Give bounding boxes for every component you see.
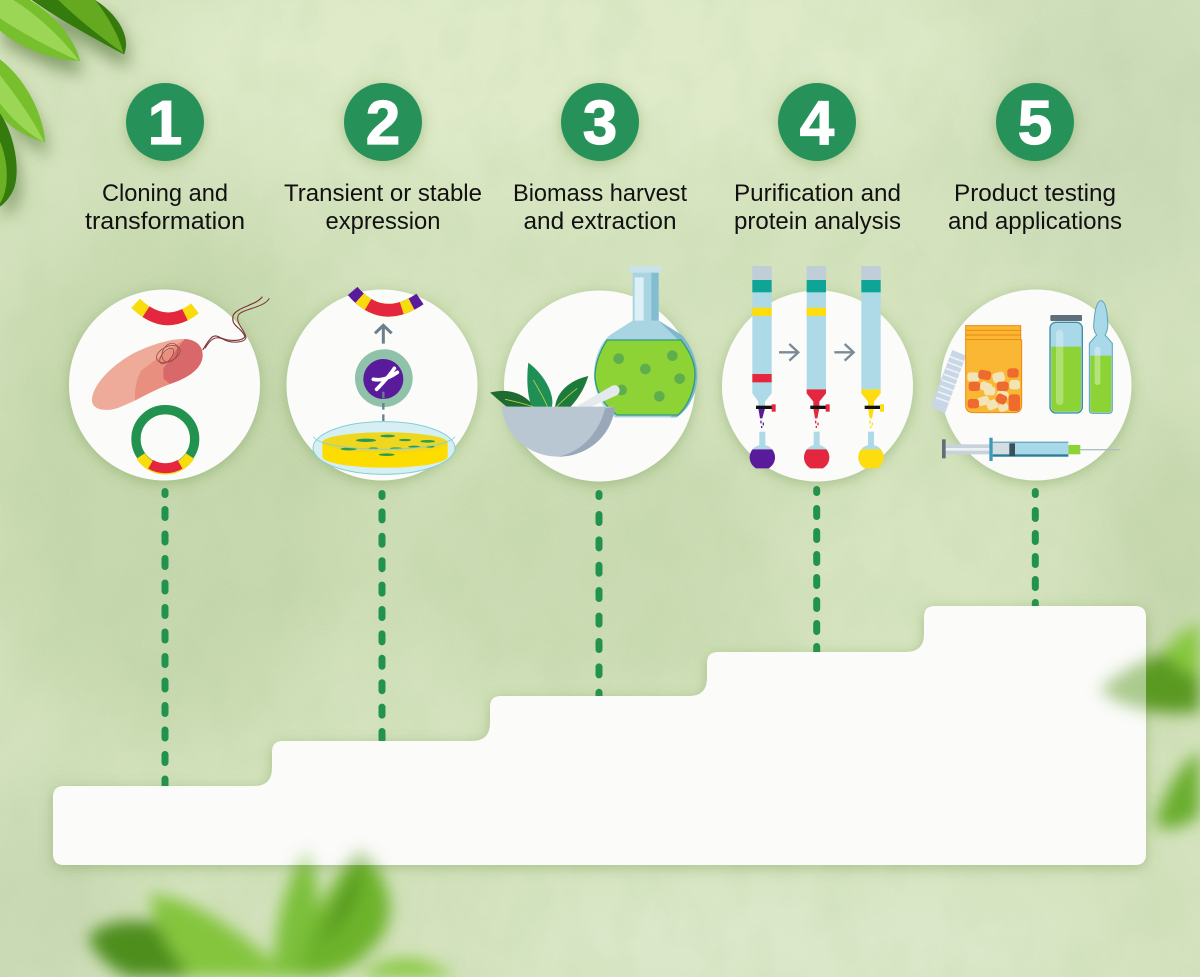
number badge 2: 2: [366, 89, 400, 158]
column 1: purple fraction: [750, 266, 776, 468]
arrow: [834, 344, 854, 361]
connector: step 2 dashed line: [378, 494, 386, 740]
number badge 1: 1: [148, 89, 182, 158]
step 5 label: and applications: [948, 208, 1122, 235]
decorative leaves: top left: [0, 0, 128, 220]
dashed line to dish: [380, 392, 387, 444]
step 3: heading: [513, 83, 687, 235]
step 5: heading: [948, 83, 1122, 235]
number badge 3: [561, 83, 639, 161]
staircase panel: [53, 606, 1146, 865]
plant cell and chromosome: [355, 349, 413, 407]
decorative blurred leaves behind panel: right edge: [1100, 622, 1200, 828]
column 3: yellow fraction: [858, 266, 884, 468]
connector: step 4 dashed line: [813, 490, 820, 654]
step 3 label: and extraction: [524, 208, 676, 235]
connector: step 3 dashed line: [596, 494, 602, 700]
illustration 4: chromatography columns: [722, 266, 913, 482]
vial: [1050, 315, 1082, 413]
mortar bowl: [502, 407, 615, 457]
ampoule: [1089, 301, 1112, 413]
blurred leaf tips fading over the panel: [286, 648, 1146, 865]
illustration 2: petri dish and cell: [286, 290, 478, 480]
step 1 label: transformation: [85, 208, 245, 235]
number badge 1: [126, 83, 204, 161]
gene fragment: [136, 303, 195, 319]
jar lid: [931, 350, 966, 413]
plasmid ring: [136, 410, 195, 469]
step 2: heading: [284, 83, 482, 235]
bacterium: [92, 297, 269, 410]
illustration 3: mortar and flask: [490, 266, 697, 482]
step 3 label: Biomass harvest: [513, 180, 687, 207]
leaves: [490, 363, 588, 407]
step 4: heading: [734, 83, 901, 235]
number badge 5: 5: [1018, 89, 1052, 158]
expressed gene fragment: [353, 291, 420, 310]
arrow up: [375, 325, 392, 344]
decorative blurred leaves behind panel: bottom centre: [88, 850, 453, 977]
number badge 4: 4: [800, 89, 835, 158]
step 4 label: protein analysis: [734, 208, 901, 235]
step 2 label: Transient or stable: [284, 180, 482, 207]
arrow: [779, 344, 798, 361]
flask: [594, 266, 697, 417]
column 2: red fraction: [804, 266, 830, 468]
step 2 label: expression: [326, 208, 440, 235]
number badge 4: [778, 83, 856, 161]
number badge 5: [996, 83, 1074, 161]
step 1 label: Cloning and: [102, 180, 228, 207]
connector: step 5 dashed line: [1032, 492, 1039, 610]
petri dish: [313, 422, 455, 474]
illustration 5: pills, vials and syringe: [931, 290, 1132, 480]
number badge 3: 3: [583, 89, 617, 158]
connector: step 1 dashed line: [162, 492, 168, 787]
syringe: [942, 438, 1120, 461]
step 1: heading: [85, 83, 245, 235]
pill jar: [966, 326, 1022, 413]
pestle: [577, 385, 620, 407]
step 5 label: Product testing: [954, 180, 1116, 207]
number badge 2: [344, 83, 422, 161]
illustration 1: bacterium and plasmid: [69, 290, 269, 480]
step 4 label: Purification and: [734, 180, 901, 207]
